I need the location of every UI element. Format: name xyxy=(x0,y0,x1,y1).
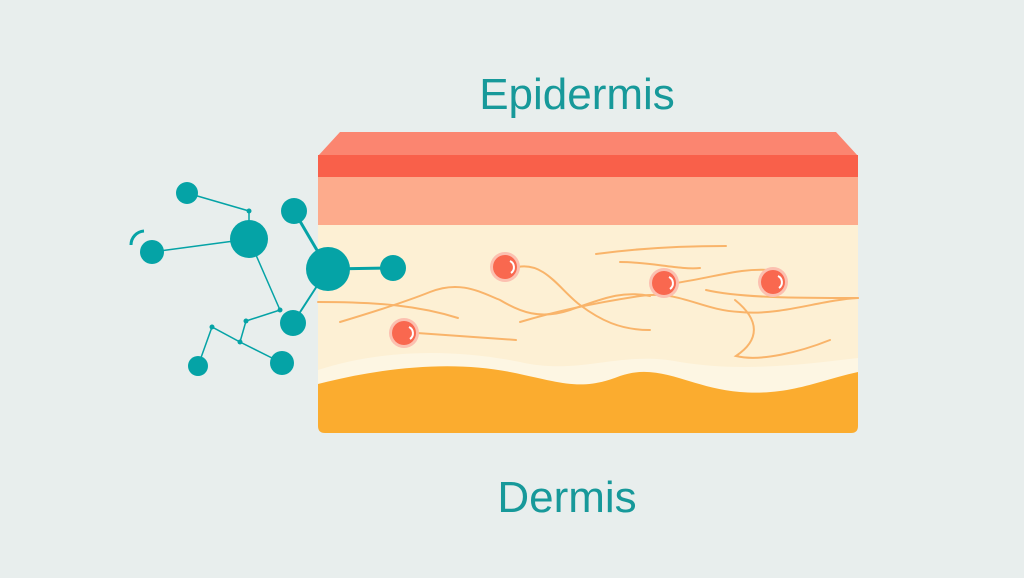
cream layer xyxy=(318,225,858,415)
skin block xyxy=(318,132,858,433)
top bevel xyxy=(318,132,858,156)
cells xyxy=(389,252,788,348)
molecule xyxy=(131,182,406,376)
orange wave layer xyxy=(318,366,858,433)
label: Dermis: Dermis xyxy=(497,473,637,522)
red layer xyxy=(318,155,858,177)
fibers xyxy=(318,246,858,358)
salmon layer xyxy=(318,177,858,225)
title: Epidermis: Epidermis xyxy=(479,70,675,119)
